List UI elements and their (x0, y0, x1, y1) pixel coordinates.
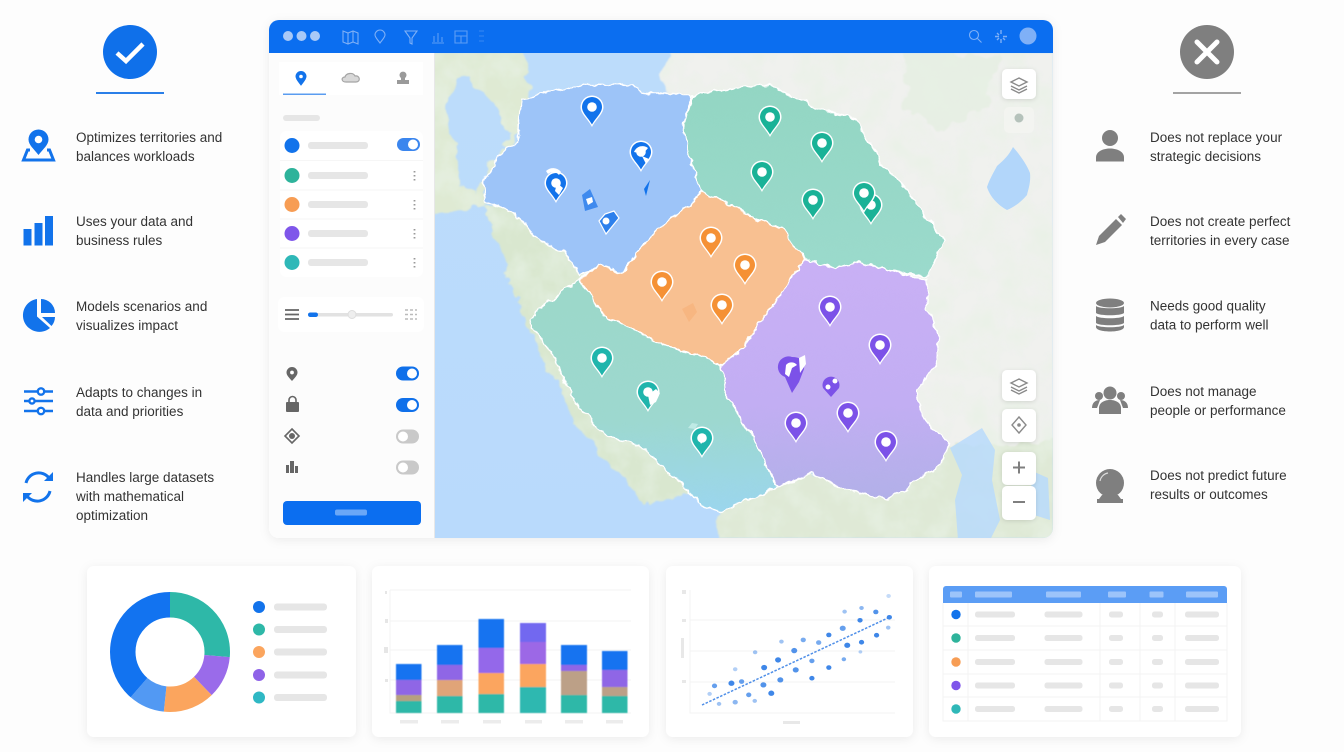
slider track (308, 313, 393, 316)
territory: green (683, 84, 944, 277)
icon: sliders (24, 388, 53, 414)
table grid (943, 603, 1227, 721)
text: strategic decisions (1150, 149, 1261, 164)
icon: active pin tab (296, 72, 306, 85)
land: north east (658, 53, 1053, 448)
text: data to perform well (1150, 318, 1269, 332)
capability: adapts (24, 385, 202, 419)
toolbar icons (343, 30, 1007, 44)
section label placeholder (283, 115, 320, 121)
option: lock (286, 397, 419, 412)
small pin (822, 377, 840, 397)
icon: cloud tab (342, 73, 359, 82)
table header (943, 586, 1227, 603)
legend (253, 601, 327, 704)
panel: stacked bar chart (372, 566, 649, 737)
panel: what the tool does (23, 25, 222, 523)
trend line (702, 617, 890, 705)
card (372, 566, 649, 737)
axis placeholders (681, 590, 800, 724)
icon: group of people (1092, 386, 1128, 414)
territories (483, 84, 948, 512)
user avatar (1020, 28, 1036, 44)
window frame (269, 20, 1053, 538)
pins: purple territory (778, 296, 898, 462)
icon: cross badge (1180, 25, 1234, 79)
top toolbar (269, 20, 1053, 53)
territory: teal (529, 280, 778, 512)
window dots (283, 31, 320, 41)
text: territories in every case (1150, 233, 1290, 248)
panel: application window (269, 20, 1070, 550)
row: purple (284, 226, 414, 241)
table row 1 (951, 610, 1219, 619)
tab bar (279, 62, 423, 95)
text: Models scenarios and (76, 299, 207, 314)
land: north east green patch (905, 53, 1000, 130)
map land (425, 40, 1070, 550)
heading underline (1173, 92, 1241, 94)
map control: locate (1002, 409, 1036, 442)
active tab underline (283, 94, 326, 95)
text: Handles large datasets (76, 470, 214, 485)
text: business rules (76, 233, 163, 248)
donut (123, 605, 217, 699)
icon: person (1096, 130, 1124, 162)
territory: purple (723, 260, 948, 500)
capability: large datasets (23, 470, 214, 523)
panel: scatter plot (666, 566, 913, 737)
pins: green territory (750, 106, 882, 225)
data points (707, 594, 892, 706)
text: Does not predict future (1150, 468, 1287, 483)
icon: database (1096, 298, 1124, 332)
text: visualizes impact (76, 318, 178, 333)
icon: pie chart (23, 299, 55, 332)
option: pin (286, 366, 419, 381)
icon: map pin (24, 130, 54, 160)
icon: person tab (397, 72, 409, 84)
row: teal (284, 255, 414, 270)
text: Adapts to changes in (76, 385, 202, 400)
land: west coast (484, 200, 690, 505)
stacked bars (396, 619, 628, 713)
icon: check badge (103, 25, 157, 79)
icon: sliders dark (285, 310, 299, 319)
table row 5 (951, 704, 1219, 714)
capability: data (24, 214, 193, 248)
limit: decisions (1096, 130, 1283, 164)
land: north west with inlet (425, 40, 530, 215)
land: south (716, 438, 1053, 538)
text: balances workloads (76, 149, 195, 164)
table row 2 (951, 633, 1219, 643)
heading underline (96, 92, 164, 94)
left sidebar (269, 53, 435, 538)
text: with mathematical (75, 489, 184, 504)
icon: sliders light (405, 310, 417, 319)
limit: data quality (1096, 298, 1269, 332)
sidebar background (269, 53, 434, 538)
row: blue (284, 138, 420, 153)
text: data and priorities (76, 404, 184, 419)
text: Does not replace your (1150, 130, 1282, 145)
apply button (283, 501, 421, 525)
option: buildings (286, 460, 419, 474)
limit: prediction (1096, 468, 1287, 503)
icon: pencil (1096, 214, 1126, 245)
territory: blue (483, 84, 702, 277)
territory: orange (580, 192, 804, 365)
lake (987, 147, 1030, 210)
text: Optimizes territories and (76, 130, 222, 145)
text: people or performance (1150, 403, 1286, 418)
text: results or outcomes (1150, 487, 1268, 502)
territory list (280, 131, 423, 277)
pin cluster (778, 355, 806, 393)
text: Needs good quality (1150, 298, 1266, 314)
text: optimization (76, 508, 148, 523)
option: target (285, 429, 419, 444)
table row 4 (951, 681, 1219, 690)
slider card (278, 297, 424, 332)
toolbar background (269, 20, 1053, 53)
axes and grid (390, 590, 631, 713)
map control: zoom out (1002, 486, 1036, 520)
icon: sync arrows (23, 472, 53, 502)
option toggles (285, 366, 419, 474)
row: green (284, 168, 414, 183)
capability: scenarios (23, 299, 207, 333)
panel: donut chart (87, 566, 356, 737)
map area (425, 40, 1070, 550)
x axis label placeholders (400, 720, 623, 724)
limit: people (1092, 384, 1286, 418)
panel: what the tool does not do (1092, 25, 1291, 503)
icon: bar chart (24, 216, 53, 246)
capability: territories (24, 130, 222, 164)
text: Uses your data and (76, 214, 193, 229)
pins: orange territory (650, 226, 756, 325)
axes and grid (690, 590, 895, 713)
text: Does not create perfect (1150, 214, 1290, 229)
card (929, 566, 1241, 737)
axis tick placeholders (384, 591, 388, 682)
map water (434, 53, 1053, 538)
icon: crystal ball (1096, 469, 1124, 503)
map control: layers top (1002, 69, 1036, 99)
limit: perfection (1096, 214, 1291, 248)
map control: zoom in (1002, 452, 1036, 485)
card (87, 566, 356, 737)
panel: data table (929, 566, 1241, 737)
water: south east bay (950, 428, 1050, 540)
map control: faded locator (1014, 114, 1024, 122)
row: orange (284, 197, 414, 212)
table row 3 (951, 657, 1219, 667)
card (666, 566, 913, 737)
text: Does not manage (1150, 384, 1257, 399)
pins: blue territory (544, 96, 652, 234)
map control: layers (1002, 370, 1036, 401)
pins: teal territory (590, 346, 714, 458)
